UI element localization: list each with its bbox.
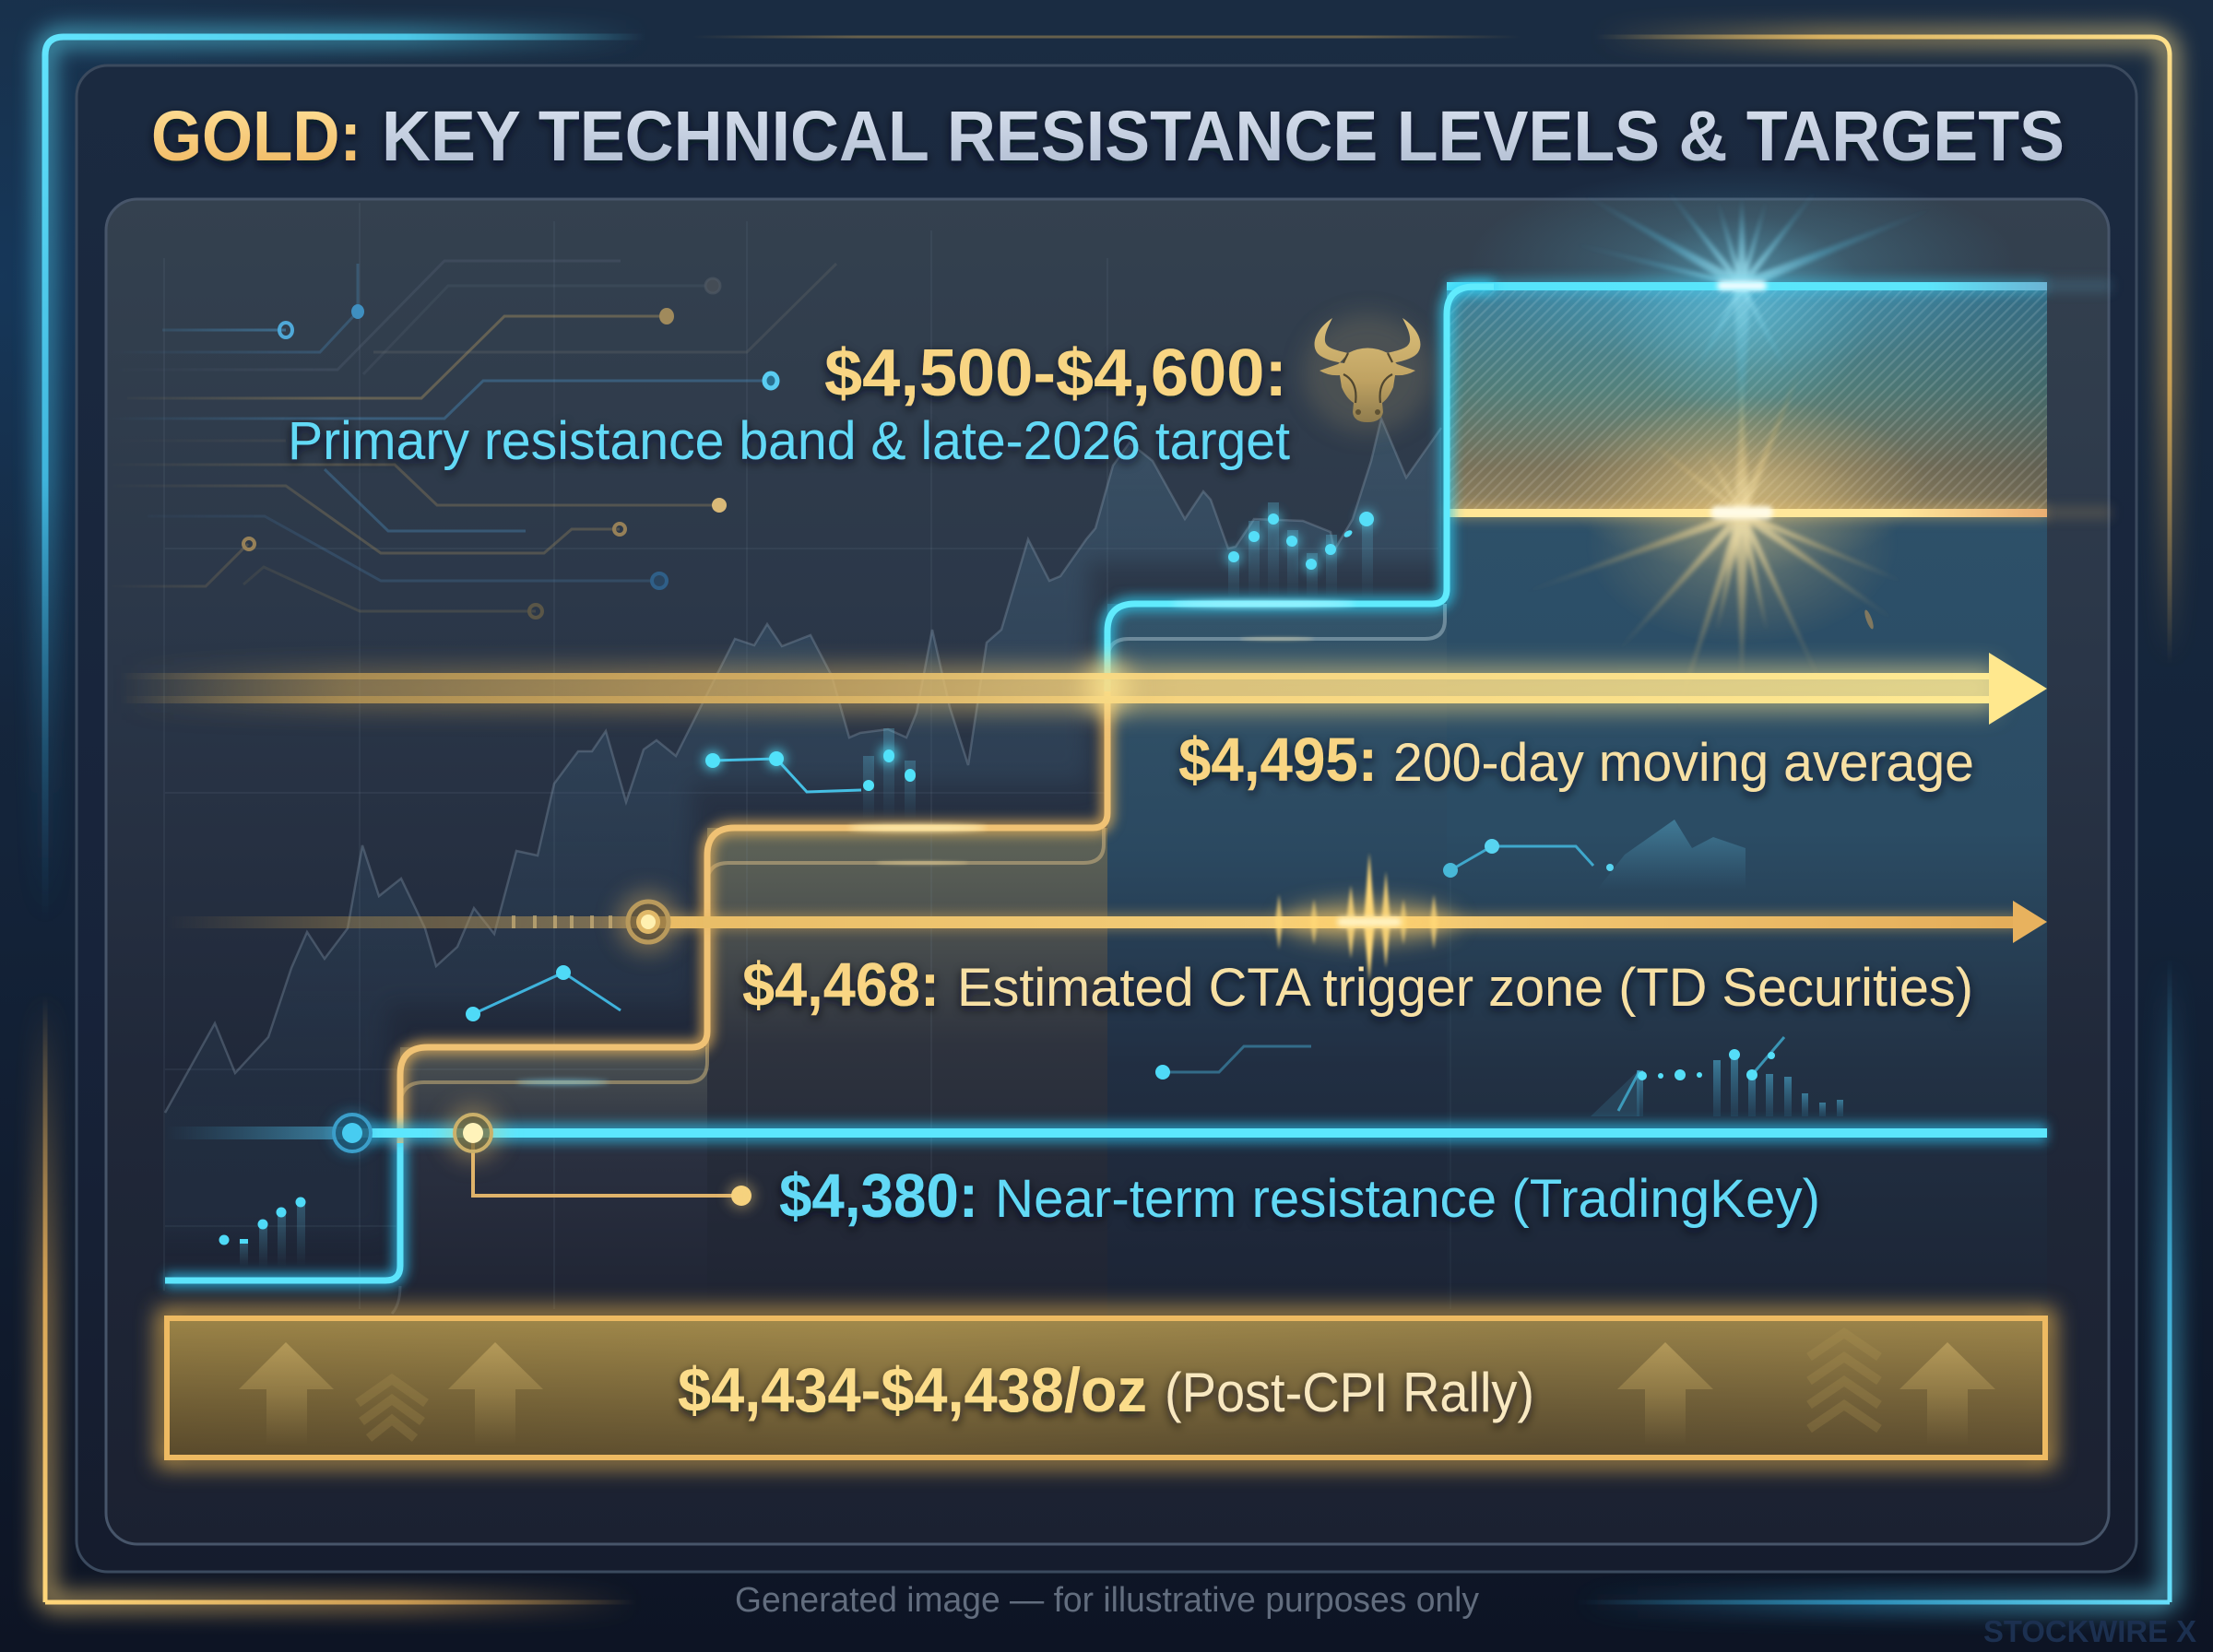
sparkline: left chart (466, 965, 621, 1021)
price bar: post-CPI rally (165, 1316, 2047, 1459)
sparkline: mid chart (704, 728, 916, 820)
icon: up arrows (239, 1342, 1995, 1446)
label: primary resistance: $4,500-$4,600: (824, 336, 1287, 410)
bar text: (Post-CPI Rally) (1165, 1362, 1534, 1423)
starburst: lower gold (1515, 367, 1926, 716)
sparkline: upper bars beside band (1226, 502, 1375, 599)
label: near-term resistance: Near-term resistance (TradingKey) (995, 1169, 1820, 1229)
starburst: upper blue (1465, 166, 2018, 461)
label: CTA trigger: $4,468: (742, 950, 940, 1020)
sparkline: right mountain (1443, 820, 1746, 890)
label: primary resistance: Primary resistance band & late-2026 target (288, 411, 1290, 471)
staircase: secondary ghost lines (392, 604, 1445, 1314)
icon: chevrons (358, 1333, 1879, 1438)
arrow: CTA trigger zone (165, 901, 2047, 943)
connector: near-term callout (473, 1133, 756, 1210)
bar text (678, 1355, 1534, 1425)
label: 200-day MA: $4,495: (1178, 726, 1378, 795)
label: 200-day MA: 200-day moving average (1393, 733, 1974, 793)
step fills beneath the staircase (400, 513, 2047, 1316)
node: CTA marker (617, 891, 680, 953)
sparkline: right bars (1591, 1037, 1843, 1116)
label: primary resistance (288, 336, 1290, 471)
label: near-term resistance: $4,380: (779, 1162, 978, 1231)
title: KEY TECHNICAL RESISTANCE LEVELS & TARGETS (382, 97, 2065, 176)
band bottom line (1447, 506, 2112, 519)
staircase: glow (165, 287, 1494, 1280)
line: near-term resistance (165, 1127, 2047, 1139)
footer note: Generated image — for illustrative purposes only (735, 1581, 1479, 1620)
bull icon (1303, 313, 1432, 433)
label: CTA trigger: Estimated CTA trigger zone (TD Securities) (957, 958, 1973, 1018)
band top line (1447, 281, 2112, 290)
panel: chart area (106, 199, 2109, 1544)
tick marks (512, 915, 612, 928)
flare on CTA line (1275, 853, 1457, 982)
sparkline: lower-left bars (219, 1197, 306, 1268)
label: near-term resistance (779, 1162, 1820, 1231)
sparkline: small trace lower right (1155, 1046, 1311, 1080)
node: blue marker (328, 1109, 376, 1157)
bar text: $4,434-$4,438/oz (678, 1355, 1147, 1425)
background price mountains (164, 417, 1442, 1114)
title: GOLD: (151, 97, 361, 176)
circuit traces (106, 261, 836, 618)
staircase: price step line (165, 287, 1494, 1280)
resistance band (1447, 287, 2047, 513)
node: gold marker (445, 1105, 501, 1161)
background grid (164, 203, 1450, 1309)
label: 200-day MA (1178, 726, 1974, 795)
arrow: 200-day moving average (120, 653, 2047, 725)
watermark: STOCKWIRE X (1983, 1614, 2196, 1648)
